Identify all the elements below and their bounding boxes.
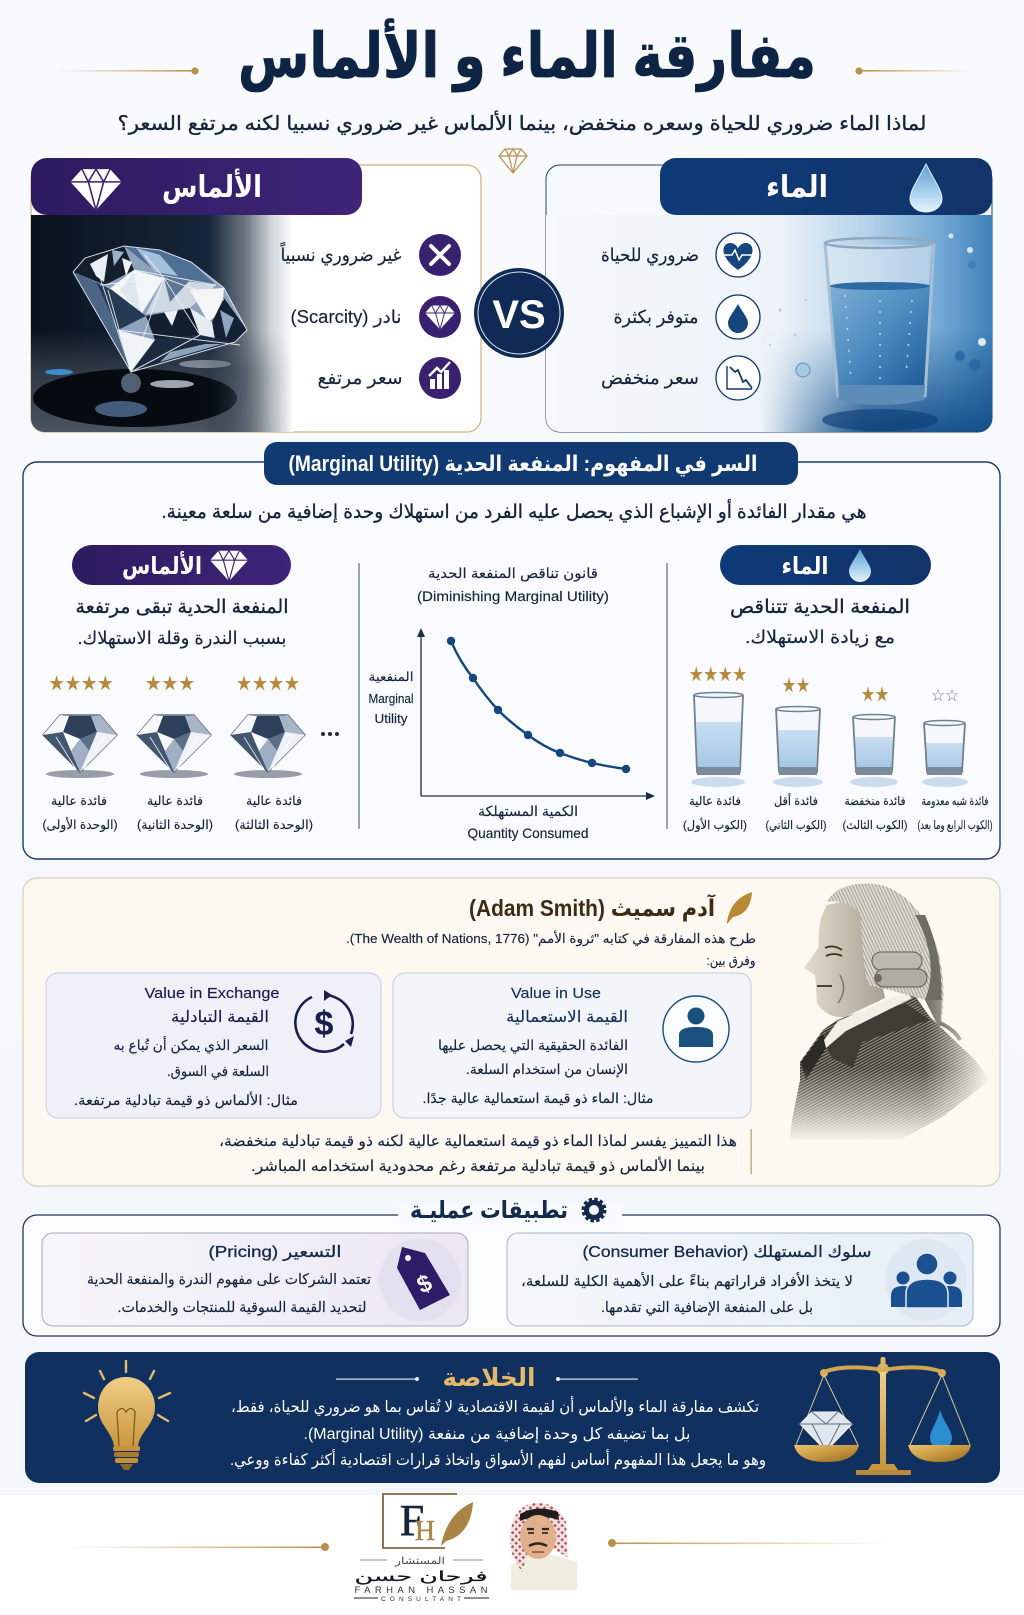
distinction note: هذا التمييز يفسر لماذا الماء ذو قيمة استعمالية عالية لكنه ذو قيمة تبادلية منخفضة، — [219, 1133, 737, 1150]
diamond captions — [42, 794, 313, 833]
logo: Farhan Hassan: F — [400, 1496, 424, 1545]
card: value in exchange: القيمة التبادلية — [171, 1009, 269, 1026]
distinction note — [219, 1129, 752, 1175]
water captions: فائدة شبه معدومة — [922, 794, 988, 809]
logo: Farhan Hassan: فرحان حسن — [354, 1568, 488, 1585]
glass: first — [691, 692, 745, 787]
logo: Farhan Hassan: المستشار — [394, 1556, 445, 1567]
water captions: (الكوب الثالث) — [842, 818, 908, 833]
row: low price: سعر منخفض — [601, 368, 699, 389]
logo: Farhan Hassan: H — [415, 1516, 435, 1547]
logo: Farhan Hassan: CONSULTANT — [381, 1596, 461, 1603]
row: not essential — [280, 234, 461, 276]
panel: water comparison — [546, 158, 992, 432]
diamond heading: بسبب الندرة وقلة الاستهلاك. — [78, 628, 286, 649]
card: consumer behavior: سلوك المستهلك (Consumer Behavior) — [582, 1244, 872, 1262]
card: value in use: الإنسان من استخدام السلعة. — [466, 1061, 628, 1078]
icon: small gold diamond — [499, 149, 527, 173]
logo: Farhan Hassan: FARHAN HASSAN — [354, 1585, 488, 1596]
row: abundant: متوفر بكثرة — [614, 307, 698, 328]
Adam Smith heading: آدم سميث (Adam Smith) — [469, 893, 716, 922]
water pill: الماء — [782, 553, 828, 580]
stars: ☆☆ — [931, 686, 959, 705]
conclusion text: وهو ما يجعل هذا المفهوم أساس لفهم الأسواق واتخاذ قرارات اقتصادية أكثر كفاءة ووعي. — [230, 1449, 766, 1470]
footer — [0, 1494, 1024, 1615]
water captions: (الكوب الثاني) — [766, 818, 826, 833]
card: value in use: مثال: الماء ذو قيمة استعمالية عالية جدًا. — [422, 1090, 654, 1107]
diamond captions: فائدة عالية — [246, 794, 302, 808]
card: value in use: الفائدة الحقيقية التي يحصل عليها — [438, 1037, 628, 1054]
water captions: فائدة منخفضة — [844, 794, 906, 808]
card: value in use — [393, 973, 751, 1118]
chart: diminishing marginal utility: المنفعية — [368, 670, 414, 684]
stars — [689, 664, 959, 706]
diamond captions: (الوحدة الثانية) — [137, 818, 213, 833]
card: value in exchange: Value in Exchange — [144, 985, 280, 1002]
card: value in exchange: السلعة في السوق. — [167, 1063, 269, 1080]
chart: diminishing marginal utility: Quantity Consumed — [468, 825, 588, 841]
glass: second — [773, 706, 823, 787]
card: pricing: لتحديد القيمة السوقية للمنتجات والخدمات. — [118, 1300, 366, 1316]
icon: people — [885, 1239, 967, 1321]
card: pricing — [42, 1233, 468, 1326]
title: مفارقة الماء و الألماس — [238, 18, 816, 92]
water heading: مع زيادة الاستهلاك. — [745, 627, 895, 648]
stars: ★★ — [782, 675, 810, 697]
chart: diminishing marginal utility — [368, 565, 655, 841]
water captions: فائدة أقل — [774, 793, 818, 808]
card: value in use: القيمة الاستعمالية — [506, 1009, 628, 1026]
distinction note: بينما الألماس ذو قيمة تبادلية مرتفعة رغم محدودية استخدامه المباشر. — [251, 1156, 705, 1175]
row: essential — [601, 233, 760, 277]
conclusion text: بل بما تضيفه كل وحدة إضافية من منفعة (Marginal Utility). — [304, 1426, 690, 1444]
icon: person — [663, 996, 729, 1062]
conclusion text — [230, 1396, 766, 1470]
panel: Adam Smith — [23, 878, 1000, 1186]
chart: diminishing marginal utility: (Diminishing Marginal Utility) — [417, 588, 609, 604]
card: value in exchange — [46, 973, 381, 1118]
diamond pill — [72, 545, 291, 585]
diamond captions: (الوحدة الأولى) — [42, 817, 118, 833]
diamond photo — [31, 215, 293, 432]
diamond heading: المنفعة الحدية تبقى مرتفعة — [76, 597, 288, 618]
conclusion text: تكشف مفارقة الماء والألماس أن لقيمة الاقتصادية لا تُقاس بما هو ضروري للحياة، فقط، — [231, 1396, 759, 1417]
icon: dollar cycle: $ — [315, 1005, 334, 1043]
row: essential: ضروري للحياة — [601, 245, 699, 266]
card: consumer behavior — [507, 1233, 973, 1326]
water captions: (الكوب الرابع وما بعد) — [918, 818, 992, 833]
big diamond — [73, 246, 247, 372]
icon: price tag: $ — [413, 1269, 437, 1299]
definition: هي مقدار الفائدة أو الإشباع الذي يحصل عليه الفرد من استهلاك وحدة إضافية من سلعة معينة. — [162, 499, 866, 524]
icon: light bulb — [84, 1361, 170, 1470]
diamond captions: (الوحدة الثالثة) — [235, 818, 313, 833]
column: diamonds — [42, 545, 339, 833]
card: consumer behavior: بل على المنفعة الإضافية التي تقدمها. — [601, 1300, 813, 1316]
conclusion title: الخلاصة — [442, 1364, 536, 1392]
row: scarce: نادر (Scarcity) — [291, 307, 402, 327]
card: pricing: التسعير (Pricing) — [209, 1244, 342, 1262]
panel: practical applications — [23, 1197, 1000, 1336]
row: abundant — [614, 295, 760, 339]
VS badge: VS — [492, 293, 546, 337]
concept heading — [264, 442, 798, 485]
water captions — [683, 793, 992, 833]
stars: ★★★★ — [48, 673, 114, 695]
book note: طرح هذه المفارقة في كتابه "ثروة الأمم" (The Wealth of Nations, 1776). — [346, 930, 756, 947]
icon: dollar cycle — [295, 990, 354, 1052]
panel: marginal utility concept — [23, 442, 1000, 859]
glass: fourth — [922, 720, 968, 787]
diamond captions: فائدة عالية — [51, 794, 107, 808]
VS badge — [474, 268, 564, 358]
footer rule right — [608, 1539, 888, 1547]
panel: diamond comparison — [31, 158, 481, 432]
applications heading: تطبيقات عمليـة — [410, 1197, 568, 1224]
row: not essential: غير ضروري نسبياً — [280, 242, 402, 266]
row: high price: سعر مرتفع — [318, 368, 402, 389]
card: value in exchange: السعر الذي يمكن أن تُباع به — [114, 1036, 268, 1054]
footer rule left — [65, 1543, 329, 1551]
conclusion title — [336, 1364, 638, 1392]
water captions: (الكوب الأول) — [683, 817, 747, 833]
row: scarce — [291, 296, 461, 338]
water captions: فائدة عالية — [689, 794, 741, 808]
icon: balance scale — [794, 1357, 971, 1475]
stars: ★★★★ — [689, 664, 747, 686]
logo: Farhan Hassan — [354, 1494, 489, 1603]
diamond header: الألماس — [162, 168, 262, 204]
concept heading: السر في المفهوم: المنفعة الحدية (Marginal Utility) — [289, 451, 758, 477]
portrait: Adam Smith — [790, 883, 990, 1140]
icon: price tag — [379, 1239, 461, 1321]
subtitle: لماذا الماء ضروري للحياة وسعره منخفض، بينما الألماس غير ضروري نسبيا لكنه مرتفع السعر؟ — [118, 111, 926, 136]
card: consumer behavior: لا يتخذ الأفراد قراراتهم بناءً على الأهمية الكلية للسلعة، — [521, 1272, 853, 1290]
diamonds row — [43, 715, 339, 778]
big glass — [822, 238, 938, 431]
water header: الماء — [766, 171, 828, 204]
water header — [660, 158, 992, 215]
diamond pill: الألماس — [122, 551, 202, 580]
water heading — [730, 597, 910, 648]
panel: conclusion — [25, 1352, 1000, 1483]
chart: diminishing marginal utility: الكمية المستهلكة — [478, 803, 578, 820]
diamond heading — [76, 597, 288, 649]
water heading: المنفعة الحدية تتناقص — [730, 597, 910, 618]
stars: ★★★★ — [236, 673, 300, 695]
stars: ★★★ — [145, 673, 195, 695]
chart: diminishing marginal utility: قانون تناقص المنفعة الحدية — [428, 565, 598, 582]
water photo — [546, 215, 992, 432]
water pill — [720, 545, 931, 585]
chart: diminishing marginal utility: Marginal — [368, 692, 414, 706]
chart: diminishing marginal utility: Utility — [374, 712, 408, 726]
row: high price — [318, 357, 461, 399]
card: value in use: Value in Use — [511, 985, 601, 1002]
book note — [346, 930, 756, 969]
card: pricing: تعتمد الشركات على مفهوم الندرة والمنفعة الحدية — [87, 1272, 371, 1288]
diamond header — [31, 158, 362, 215]
diamond captions: فائدة عالية — [147, 794, 203, 808]
row: low price — [601, 356, 760, 400]
column: water — [683, 545, 992, 833]
portrait: consultant — [510, 1503, 577, 1590]
stars — [48, 673, 300, 695]
glass: third — [850, 714, 898, 787]
book note: وفرق بين: — [706, 953, 756, 969]
stars: ★★ — [861, 684, 889, 706]
card: value in exchange: مثال: الألماس ذو قيمة تبادلية مرتفعة. — [74, 1091, 298, 1109]
